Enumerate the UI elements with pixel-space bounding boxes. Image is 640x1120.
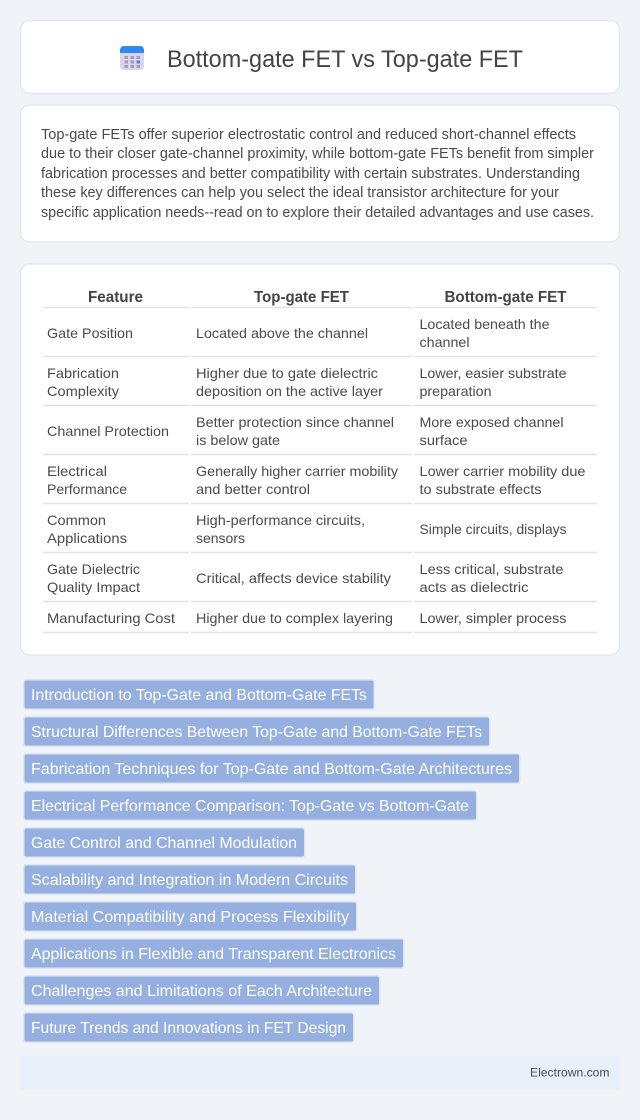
intro paragraph bbox=[41, 127, 594, 221]
row: manufacturing cost: Manufacturing Cost bbox=[47, 610, 175, 626]
tag: fabrication techniques bbox=[24, 754, 520, 783]
tag: future trends: Future Trends and Innovations in FET Design bbox=[31, 1020, 346, 1037]
tag: electrical performance bbox=[24, 791, 477, 820]
tag: material compatibility: Material Compatibility and Process Flexibility bbox=[31, 909, 349, 926]
row: electrical performance: Performance bbox=[47, 481, 127, 497]
footer bbox=[20, 1056, 620, 1090]
icon: calendar grid bbox=[120, 46, 144, 70]
row: common applications bbox=[47, 512, 566, 546]
tag: challenges bbox=[24, 976, 380, 1005]
row: electrical performance: Electrical bbox=[47, 463, 107, 479]
tag: introduction bbox=[24, 680, 374, 709]
table header: Bottom-gate FET bbox=[444, 289, 567, 306]
panel: introduction bbox=[20, 105, 620, 242]
row: fabrication complexity bbox=[47, 365, 567, 399]
row: channel protection: is below gate bbox=[196, 432, 280, 448]
row: gate dielectric quality impact: Gate Dielectric bbox=[47, 561, 140, 577]
row: gate position: Located above the channel bbox=[196, 325, 368, 341]
intro paragraph: due to their closer gate-channel proximity, while bottom-gate FETs benefit from simpler bbox=[41, 146, 594, 162]
table header: Top-gate FET bbox=[254, 289, 350, 306]
row: gate position bbox=[47, 316, 550, 350]
intro paragraph: Top-gate FETs offer superior electrostatic control and reduced short-channel effects bbox=[41, 127, 576, 143]
title: Bottom-gate FET vs Top-gate FET bbox=[167, 46, 523, 73]
tag: structural differences bbox=[24, 717, 490, 746]
footer: Electrown.com bbox=[530, 1066, 610, 1080]
row: electrical performance: Lower carrier mobility due bbox=[420, 463, 586, 479]
intro paragraph: specific application needs--read on to explore their detailed advantages and use cases. bbox=[41, 205, 594, 221]
row: electrical performance: to substrate effects bbox=[420, 481, 542, 497]
tag: material compatibility bbox=[24, 902, 357, 931]
tag: challenges: Challenges and Limitations of Each Architecture bbox=[31, 983, 372, 1000]
tag: gate control: Gate Control and Channel Modulation bbox=[31, 835, 297, 852]
tag: gate control bbox=[24, 828, 305, 857]
row: fabrication complexity: Higher due to gate dielectric bbox=[196, 365, 378, 381]
row: gate dielectric quality impact: Less critical, substrate bbox=[420, 561, 564, 577]
row: gate position: channel bbox=[420, 334, 470, 350]
title card bbox=[20, 20, 620, 94]
row: common applications: High-performance circuits, bbox=[196, 512, 365, 528]
row: gate dielectric quality impact: Critical, affects device stability bbox=[196, 570, 391, 586]
row: common applications: Common bbox=[47, 512, 106, 528]
tag: scalability: Scalability and Integration in Modern Circuits bbox=[31, 872, 348, 889]
tag: fabrication techniques: Fabrication Techniques for Top-Gate and Bottom-Gate Architectures bbox=[31, 761, 512, 778]
tag: applications bbox=[24, 939, 404, 968]
tag: applications: Applications in Flexible and Transparent Electronics bbox=[31, 946, 396, 963]
tag: structural differences: Structural Differences Between Top-Gate and Bottom-Gate FETs bbox=[31, 724, 482, 741]
table header: Feature bbox=[88, 289, 143, 306]
row: fabrication complexity: Fabrication bbox=[47, 365, 119, 381]
row: manufacturing cost bbox=[47, 610, 566, 626]
row: common applications: sensors bbox=[196, 530, 245, 546]
row: gate dielectric quality impact: Quality Impact bbox=[47, 579, 140, 595]
topic tag list bbox=[24, 680, 520, 1042]
table header bbox=[88, 289, 567, 306]
row: manufacturing cost: Lower, simpler process bbox=[420, 610, 566, 626]
row: channel protection: Better protection since channel bbox=[196, 414, 394, 430]
row: common applications: Simple circuits, displays bbox=[420, 521, 566, 537]
tag: scalability bbox=[24, 865, 356, 894]
intro paragraph: fabrication processes and better compatibility with certain substrates. Understanding bbox=[41, 166, 580, 182]
row: gate position: Located beneath the bbox=[420, 316, 550, 332]
row: electrical performance: Generally higher carrier mobility bbox=[196, 463, 398, 479]
row: channel protection: More exposed channel bbox=[420, 414, 564, 430]
row: fabrication complexity: preparation bbox=[420, 383, 492, 399]
row: gate dielectric quality impact: acts as dielectric bbox=[420, 579, 528, 595]
row: fabrication complexity: Complexity bbox=[47, 383, 119, 399]
row: channel protection: surface bbox=[420, 432, 468, 448]
row: gate position: Gate Position bbox=[47, 325, 133, 341]
row: electrical performance: and better control bbox=[196, 481, 310, 497]
tag: introduction: Introduction to Top-Gate and Bottom-Gate FETs bbox=[31, 687, 367, 704]
row: fabrication complexity: deposition on the active layer bbox=[196, 383, 383, 399]
panel: comparison table bbox=[20, 264, 620, 655]
row: electrical performance bbox=[47, 463, 586, 497]
row: gate dielectric quality impact bbox=[47, 561, 564, 595]
row: common applications: Applications bbox=[47, 530, 127, 546]
row: manufacturing cost: Higher due to complex layering bbox=[196, 610, 393, 626]
intro paragraph: these key differences can help you select the ideal transistor architecture for your bbox=[41, 185, 559, 201]
tag: future trends bbox=[24, 1013, 354, 1042]
tag: electrical performance: Electrical Performance Comparison: Top-Gate vs Bottom-Gate bbox=[31, 798, 469, 815]
row: channel protection: Channel Protection bbox=[47, 423, 169, 439]
row: channel protection bbox=[47, 414, 564, 448]
row: fabrication complexity: Lower, easier substrate bbox=[420, 365, 567, 381]
